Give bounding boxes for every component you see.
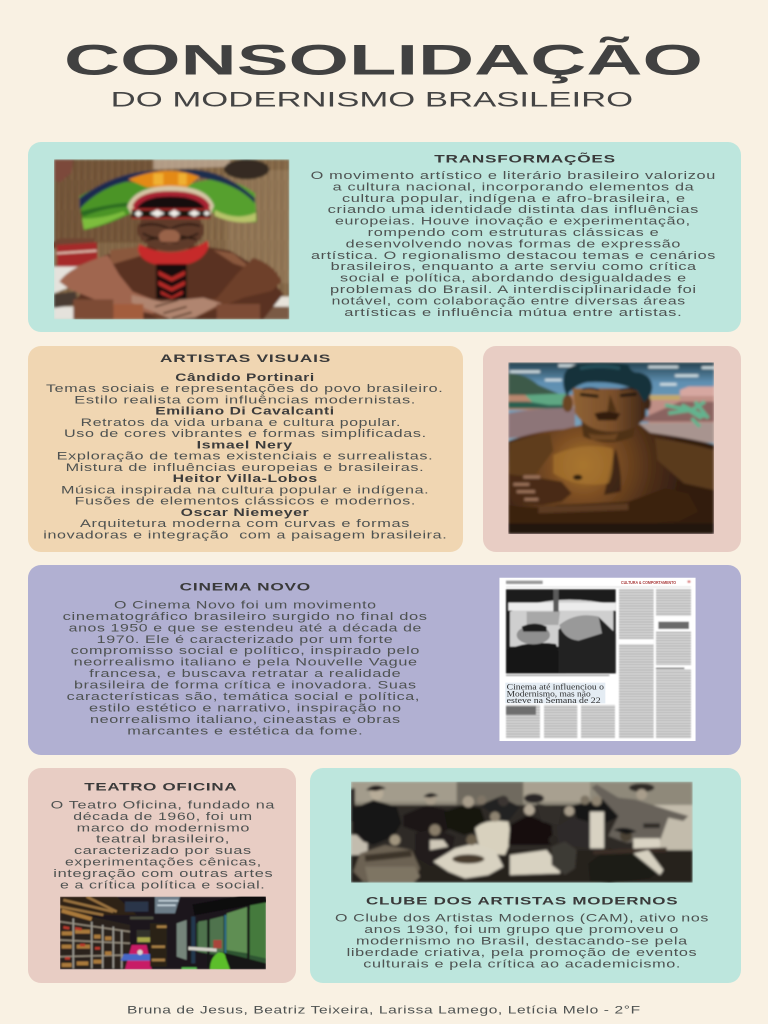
text block: teatro oficina (51, 799, 275, 892)
text block: artists list: Fusões de elementos clássicos e modernos. (75, 496, 416, 508)
text block: artists list: Emiliano Di Cavalcanti (155, 406, 335, 418)
text block: cinema novo: cinematográfico brasileiro surgido no final dos (63, 611, 428, 623)
photo: group of artists (351, 782, 693, 883)
feathers (78, 180, 152, 230)
heading: teatro oficina: TEATRO OFICINA (84, 782, 237, 794)
newspaper header: CULTURA & COMPORTAMENTO (621, 580, 677, 585)
center floor (130, 917, 153, 919)
newspaper headline: Cinema até influenciou o (507, 683, 604, 692)
text block: teatro oficina: O Teatro Oficina, fundado na (51, 799, 275, 811)
text block: cinema novo: brasileira de forma crítica e inovadora. Suas (74, 680, 417, 692)
newspaper columns (506, 705, 540, 738)
text block: teatro oficina: integração com outras artes (53, 868, 273, 880)
hair (563, 362, 652, 402)
text block: clube dos artistas modernos: modernismo no Brasil, destacando-se pela (356, 936, 688, 948)
panel: cinema novo (28, 565, 741, 755)
text block: transformações: desenvolvendo novas formas de expressão (346, 238, 681, 250)
text block: teatro oficina: década de 1960, foi um (73, 811, 253, 823)
torso (508, 424, 714, 534)
text block: transformações: criando uma identidade distinta das influências (328, 204, 699, 216)
text block: cinema novo: características são, temática social e política, (67, 691, 420, 703)
text block: teatro oficina: teatral brasileiro, (96, 834, 230, 846)
text block: clube dos artistas modernos (335, 913, 709, 970)
text block: transformações: artística. O regionalismo destacou temas e cenários (311, 250, 716, 262)
text block: transformações: rompendo com estruturas clássicas e (368, 227, 659, 239)
text block: artists list: Música inspirada na cultura popular e indígena. (61, 484, 429, 496)
text block: artists list: Cândido Portinari (175, 372, 315, 384)
text block: cinema novo: marcantes e estética da fome. (127, 726, 363, 738)
text block: artists list: Heitor Villa-Lobos (173, 473, 318, 485)
heading: clube dos artistas modernos: CLUBE DOS ARTISTAS MODERNOS (366, 896, 678, 908)
text block: transformações: europeias. Houve inovação e experimentação, (335, 216, 691, 228)
text block: artists list: inovadoras e integração com a paisagem brasileira. (43, 529, 447, 541)
panel: painting (483, 346, 741, 552)
text block: cinema novo: neorrealismo italiano, cineastas e obras (90, 714, 401, 726)
text block: cinema novo: estilo estético e narrativo, inspiração no (89, 703, 402, 715)
photo: indigenous child with feather headdress (40, 159, 289, 319)
text block: teatro oficina: experimentações cênicas, (65, 857, 262, 869)
heading: artistas visuais: ARTISTAS VISUAIS (160, 353, 331, 365)
text block: transformações (311, 170, 716, 319)
crossed arms (508, 488, 696, 524)
heading: cinema novo: CINEMA NOVO (180, 582, 311, 594)
panel: teatro oficina (28, 768, 296, 983)
text block: artists list: Estilo realista com influências modernistas. (74, 394, 416, 406)
text block: transformações: notável, com colaboração entre diversas áreas (332, 295, 686, 307)
torso (77, 246, 283, 319)
text block: clube dos artistas modernos: culturais e pela crítica ao academicismo. (363, 958, 681, 970)
necklace (138, 241, 209, 266)
newspaper headline (505, 683, 605, 705)
text block: artists list: Arquitetura moderna com curvas e formas (80, 518, 410, 530)
text block: cinema novo: compromisso social e político, inspirado pelo (71, 645, 420, 657)
newspaper headline: Modernismo, mas não (507, 689, 591, 698)
text block: artists list: Exploração de temas existenciais e surrealistas. (57, 451, 433, 463)
text block: transformações: brasileiros, enquanto a arte serviu como crítica (331, 261, 697, 273)
heading: transformações: TRANSFORMAÇÕES (434, 152, 616, 166)
text block: cinema novo: 1970. Ele é caracterizado por um forte (97, 634, 393, 646)
text block: teatro oficina: caracterizado por suas (74, 845, 252, 857)
painting: portrait of shirtless man (508, 362, 715, 534)
woman in dark dress (557, 817, 590, 848)
footer: authors: Bruna de Jesus, Beatriz Teixeira, Larissa Lamego, Letícia Melo - 2°F (127, 1004, 641, 1016)
woman in white blouse (475, 821, 512, 855)
text block: clube dos artistas modernos: O Clube dos Artistas Modernos (CAM), ativo nos (335, 913, 709, 925)
text block: cinema novo: anos 1950 e que se estendeu até a década de (69, 622, 422, 634)
panel: artistas visuais (28, 346, 463, 552)
photo: teatro oficina interior (60, 897, 266, 969)
title: CONSOLIDAÇÃO (64, 36, 703, 84)
text block: artists list (43, 372, 447, 541)
text block: clube dos artistas modernos: anos 1930, foi um grupo que promoveu o (364, 924, 679, 936)
neck and head (580, 420, 634, 444)
text block: cinema novo: O Cinema Novo foi um movimento (114, 599, 377, 611)
shelves (60, 910, 130, 968)
standing men (353, 800, 402, 845)
text block: cinema novo (63, 599, 428, 738)
subtitle: DO MODERNISMO BRASILEIRO (111, 89, 633, 112)
text block: transformações: problemas do Brasil. A interdisciplinaridade foi (330, 284, 697, 296)
text block: transformações: cultura popular, indígena e afro-brasileira, e (342, 193, 686, 205)
neck and face (156, 248, 188, 254)
man with raised arm (592, 784, 688, 843)
text block: teatro oficina: e a crítica política e social. (60, 880, 265, 892)
man in dark suit (508, 815, 553, 845)
seated musicians (416, 832, 454, 852)
text block: transformações: O movimento artístico e literário brasileiro valorizou (311, 170, 716, 182)
text block: cinema novo: francesa, e buscava retratar a realidade (89, 668, 401, 680)
panel: clube dos artistas modernos (310, 768, 741, 983)
panel: transformações (28, 142, 741, 332)
text block: cinema novo: neorrealismo italiano e pela Nouvelle Vague (74, 657, 418, 669)
text block: teatro oficina: marco do modernismo (77, 822, 250, 834)
newspaper headline: esteve na Semana de 22 (507, 696, 601, 705)
image: newspaper page (499, 578, 696, 741)
text block: artists list: Uso de cores vibrantes e formas simplificadas. (64, 428, 427, 440)
text block: transformações: social e política, abordando desigualdades e (340, 273, 687, 285)
text block: transformações: artísticas e influência mútua entre artistas. (344, 307, 682, 319)
text block: artists list: Oscar Niemeyer (181, 507, 310, 519)
text block: artists list: Temas sociais e representações do povo brasileiro. (46, 383, 443, 395)
text block: artists list: Ismael Nery (197, 439, 293, 451)
text block: artists list: Retratos da vida urbana e cultura popular. (81, 417, 401, 429)
text block: clube dos artistas modernos: liberdade criativa, pela promoção de eventos (347, 947, 697, 959)
text block: artists list: Mistura de influências europeias e brasileiras. (66, 462, 424, 474)
text block: transformações: a cultura nacional, incorporando elementos da (333, 181, 695, 193)
windows (177, 920, 187, 960)
newspaper photo (506, 589, 616, 673)
arms (59, 255, 166, 316)
hair and headband (127, 186, 214, 215)
